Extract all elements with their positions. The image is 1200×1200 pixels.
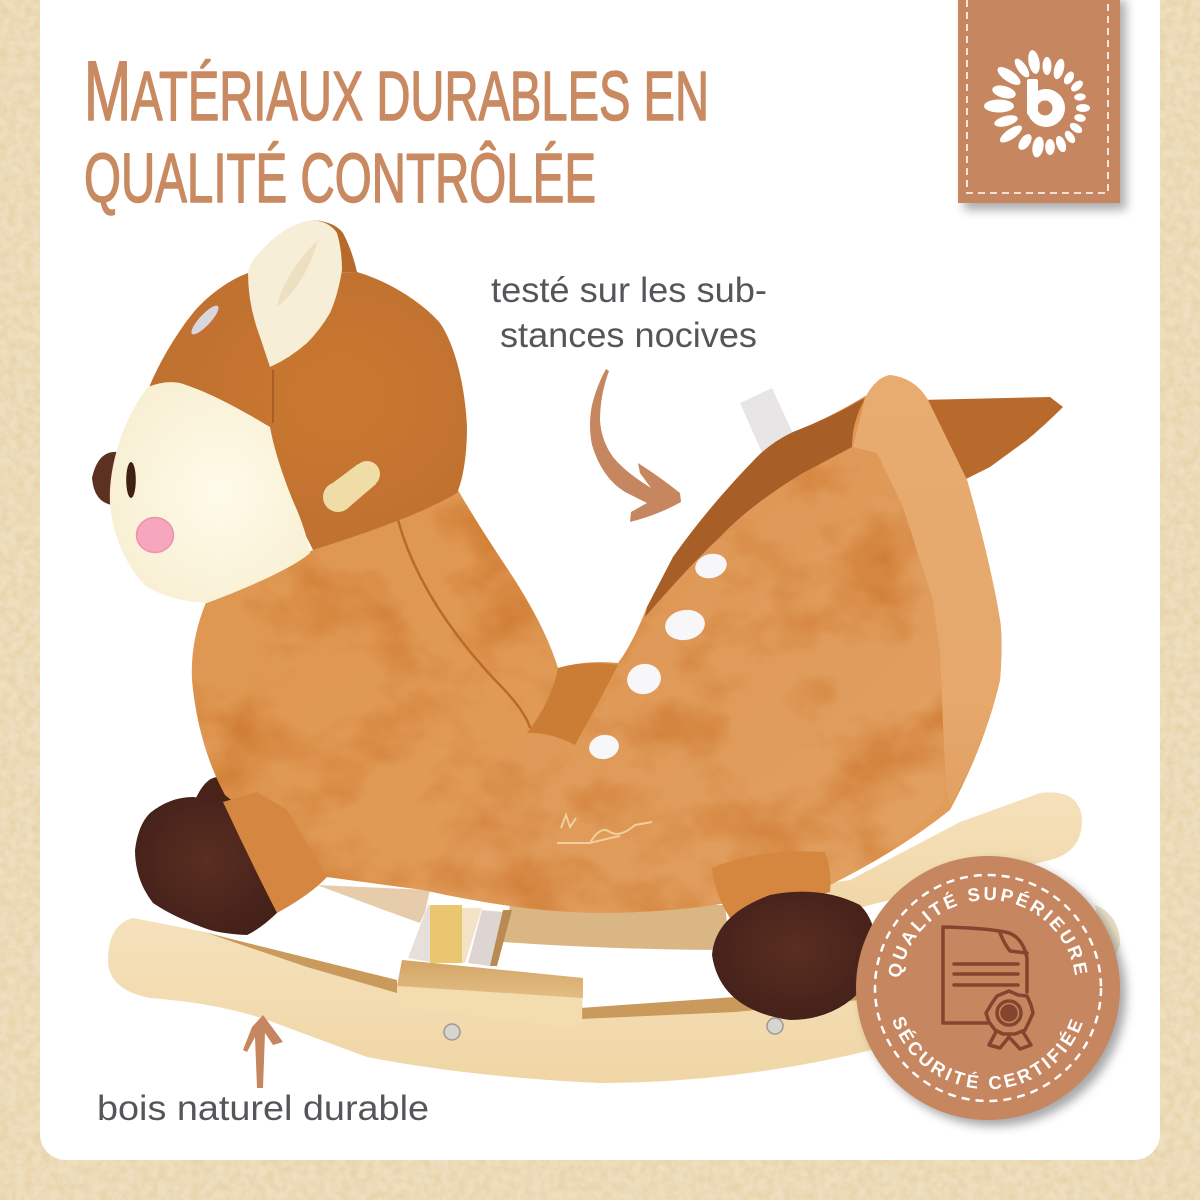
front hoof bbox=[135, 797, 280, 935]
white back spots bbox=[587, 550, 730, 761]
logo sunflower mark bbox=[984, 49, 1090, 158]
cheek bbox=[136, 518, 174, 552]
title: QUALITÉ CONTRÔLÉE bbox=[84, 139, 596, 217]
rear gusset rim bbox=[853, 375, 1002, 805]
eye bbox=[126, 462, 136, 498]
rail under body left bbox=[317, 885, 430, 923]
deer rear tail bbox=[920, 397, 1063, 482]
rear rocker rail bbox=[780, 792, 1082, 925]
badge text bottom: SÉCURITÉ CERTIFIÉE bbox=[893, 1016, 1083, 1090]
label: harmful substances tested bbox=[491, 271, 767, 355]
wooden support with strap bbox=[408, 905, 512, 966]
forehead spot bbox=[188, 302, 222, 338]
head seam bbox=[272, 370, 274, 423]
back ear bbox=[313, 220, 357, 272]
front leg bbox=[223, 792, 327, 913]
right rail far end bbox=[1095, 905, 1120, 970]
brand logo tag bbox=[958, 0, 1126, 210]
nose bbox=[92, 452, 118, 505]
arrow up to wood bbox=[243, 1015, 283, 1088]
title bbox=[84, 44, 709, 217]
antler knob bbox=[323, 461, 380, 512]
back foot behind body bbox=[195, 777, 240, 805]
rear hoof bbox=[712, 892, 876, 1020]
deer head bbox=[92, 220, 467, 603]
mottled shading bbox=[190, 370, 1010, 920]
label: natural wood: bois naturel durable bbox=[97, 1089, 429, 1128]
front ear bbox=[248, 220, 342, 367]
body seam bbox=[398, 520, 530, 728]
face patch bbox=[110, 382, 310, 603]
badge text top: QUALITÉ SUPÉRIEURE bbox=[888, 887, 1088, 977]
seat back inner bbox=[645, 398, 865, 617]
arrow to seat bbox=[590, 369, 681, 522]
certificate icon bbox=[943, 927, 1033, 1049]
block top face bbox=[397, 960, 583, 998]
seat bbox=[527, 663, 618, 745]
hanging label strap bbox=[740, 388, 795, 455]
support post bbox=[430, 905, 462, 963]
wooden seat block bbox=[397, 960, 583, 1028]
rear leg bbox=[712, 851, 830, 918]
dark inner rail edge bbox=[207, 933, 397, 993]
title: MATÉRIAUX DURABLES EN bbox=[84, 44, 709, 138]
gold signature bbox=[557, 815, 652, 843]
label: harmful substances tested: testé sur les sub- bbox=[491, 271, 767, 310]
front rocker bbox=[108, 918, 880, 1083]
label: harmful substances tested: stances nocives bbox=[500, 316, 757, 355]
inner rail bbox=[503, 905, 730, 950]
screws bbox=[444, 1018, 783, 1040]
deer body bbox=[190, 370, 1010, 920]
rear side panel bbox=[423, 447, 945, 913]
quality badge bbox=[856, 856, 1132, 1132]
ear fold bbox=[277, 240, 318, 307]
